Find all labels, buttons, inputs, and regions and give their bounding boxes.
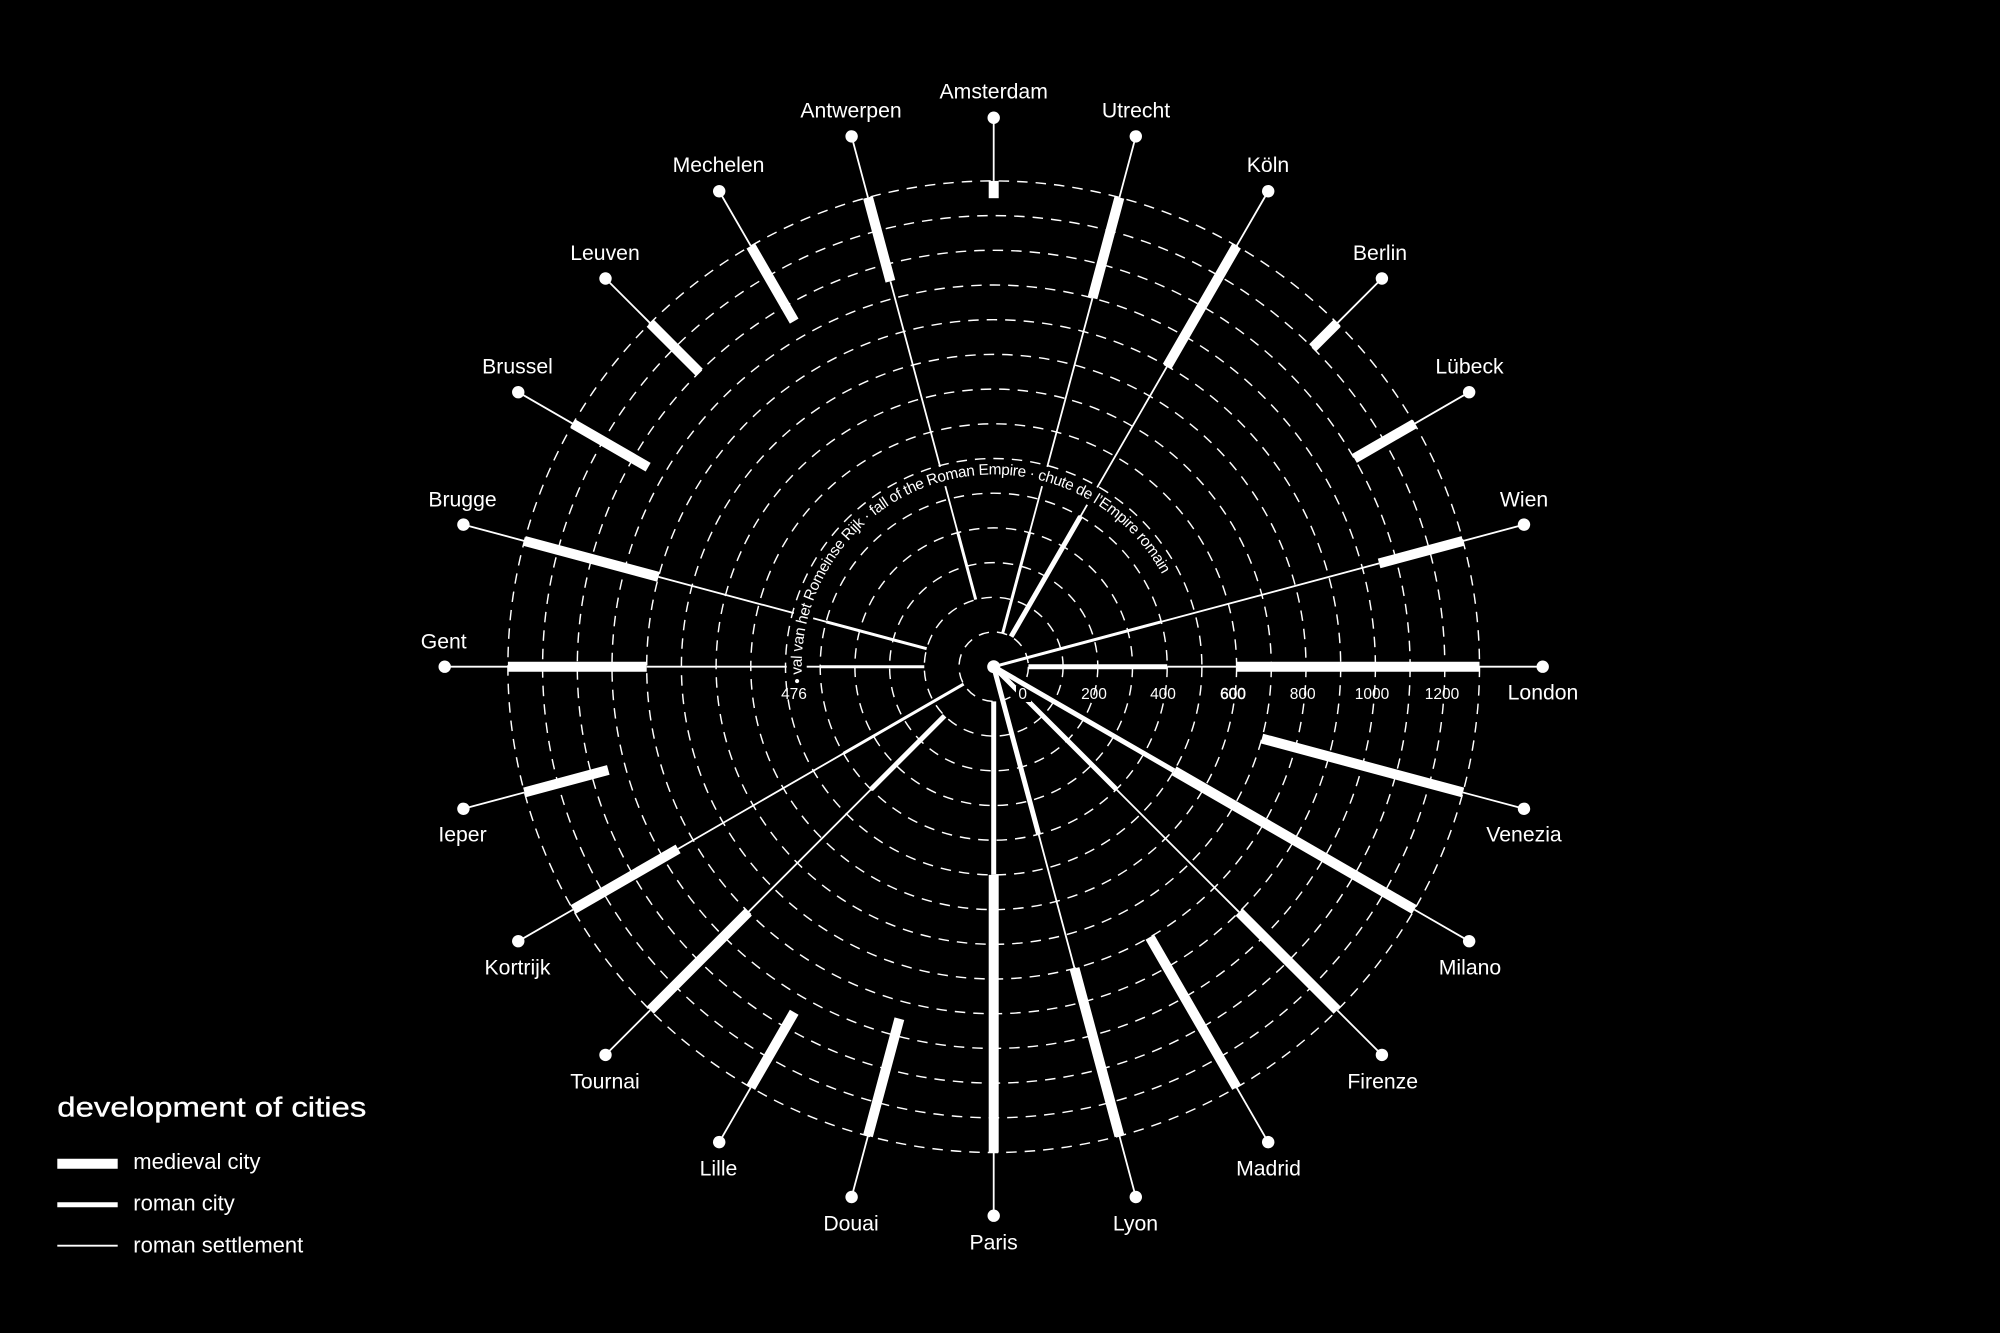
spoke: Wien	[992, 517, 1532, 673]
spoke: Douai	[844, 1017, 905, 1205]
city labels: Kortrijk	[485, 956, 551, 979]
legend title: development of cities	[57, 1092, 366, 1123]
city labels: Wien	[1500, 488, 1548, 512]
radial chart	[438, 112, 1549, 1222]
city labels: Tournai	[570, 1070, 640, 1093]
spoke: Brugge	[456, 517, 928, 655]
spoke: Köln	[1006, 183, 1277, 640]
city labels: Lübeck	[1435, 356, 1504, 378]
spoke: Berlin	[1308, 270, 1391, 352]
city labels: Paris	[969, 1232, 1018, 1254]
curved text: fall of the Roman Empire: • val van het Romeinse Rijk · fall of the Roman Empire · chute de l’Empire romain	[790, 464, 1168, 684]
spoke: Gent	[438, 660, 924, 673]
spoke: Utrecht	[997, 129, 1143, 635]
spoke: Venezia	[1260, 733, 1532, 816]
city labels: Leuven	[570, 242, 640, 265]
spoke: Amsterdam	[988, 112, 1000, 198]
spoke: Mechelen	[711, 183, 800, 324]
spoke: Kortrijk	[510, 679, 967, 950]
axis labels: 200	[1081, 686, 1107, 703]
axis labels: 400	[1150, 686, 1176, 703]
spoke: Leuven	[597, 270, 704, 377]
city labels: Utrecht	[1102, 99, 1170, 122]
axis labels: 1200	[1425, 686, 1460, 703]
spoke: Antwerpen	[844, 129, 982, 601]
axis labels: 800	[1290, 686, 1316, 703]
spoke: Brussel	[510, 384, 651, 473]
city labels	[421, 81, 1578, 1255]
city labels: Lyon	[1113, 1212, 1158, 1236]
spoke: Lübeck	[1351, 384, 1478, 464]
city labels: Lille	[700, 1158, 737, 1180]
city labels: Berlin	[1353, 242, 1407, 265]
spoke: Tournai	[597, 711, 949, 1064]
spoke: Ieper	[456, 764, 610, 816]
spoke: Lyon	[988, 665, 1143, 1205]
axis labels: 476	[781, 686, 807, 703]
legend	[57, 1092, 366, 1258]
axis labels: 1000	[1355, 686, 1390, 703]
city labels: Gent	[421, 631, 467, 654]
city labels: Brugge	[428, 488, 497, 512]
city labels: Brussel	[482, 356, 553, 378]
city labels: Milano	[1439, 956, 1501, 979]
legend item: medieval city: medieval city	[133, 1149, 260, 1174]
centre dot	[987, 660, 1000, 673]
city labels: Amsterdam	[940, 81, 1048, 104]
black band behind curved text	[797, 470, 1170, 687]
city labels: Köln	[1247, 154, 1289, 177]
spoke: Lille	[711, 1009, 800, 1151]
city labels: Douai	[823, 1212, 879, 1236]
spoke: Firenze	[989, 662, 1391, 1064]
city labels: Venezia	[1486, 824, 1562, 846]
city labels: London	[1508, 681, 1578, 704]
city labels: Mechelen	[673, 154, 764, 177]
legend item: roman city: roman city	[133, 1191, 235, 1216]
spoke: Paris	[988, 701, 1000, 1222]
city labels: Firenze	[1347, 1070, 1418, 1093]
city labels: Madrid	[1236, 1158, 1301, 1180]
axis labels: 600	[1220, 686, 1246, 703]
dashed century rings	[508, 181, 1480, 1152]
city labels: Antwerpen	[800, 99, 902, 122]
spoke: London	[1028, 660, 1549, 673]
black box behind year 0	[1016, 686, 1031, 702]
spoke: Madrid	[1144, 934, 1277, 1151]
spoke: Milano	[991, 661, 1478, 950]
legend item: roman settlement: roman settlement	[133, 1233, 303, 1258]
axis labels: 0	[1018, 686, 1027, 703]
city labels: Ieper	[438, 824, 487, 846]
axis labels	[781, 686, 1460, 703]
